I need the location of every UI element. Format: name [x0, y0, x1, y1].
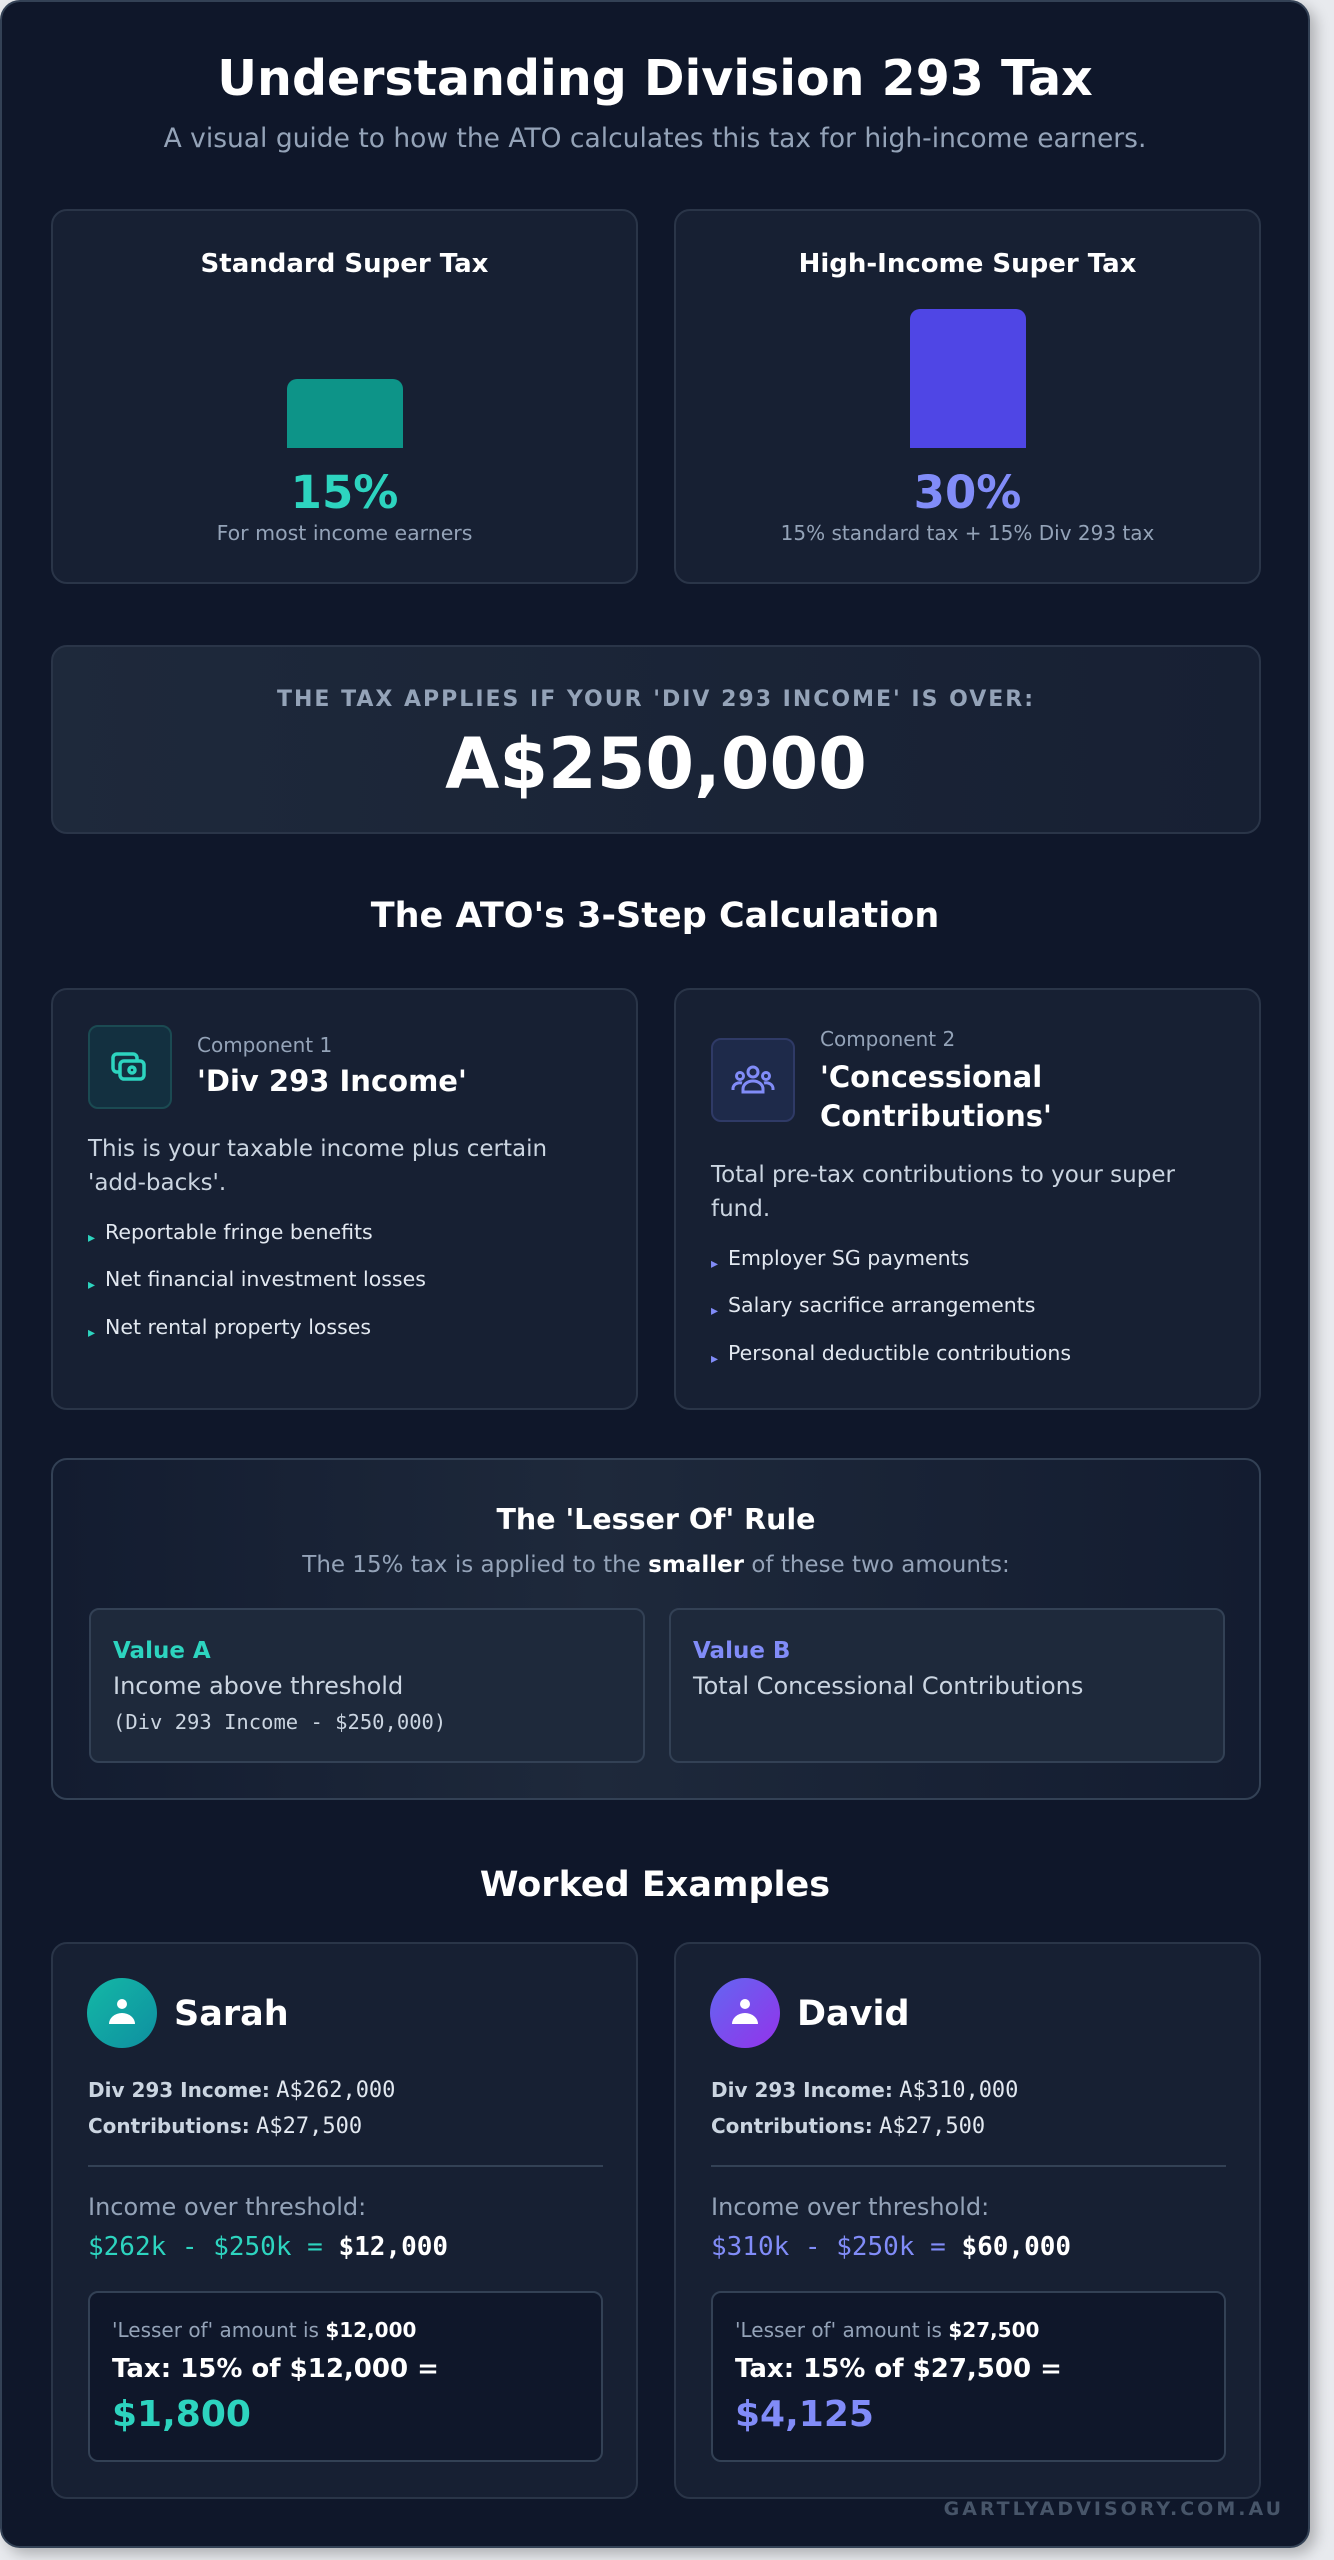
list: add-backs: Net financial investment losses [105, 1267, 426, 1291]
panel: component 1: 'Div 293 Income' [197, 1064, 467, 1098]
box: result David [711, 2291, 1226, 2462]
box: value A: Value A [113, 1638, 211, 1664]
title: Understanding Division 293 Tax [217, 50, 1093, 107]
panel: component 2: Component 2 [820, 1027, 955, 1051]
panel: standard super tax: 15% [291, 466, 398, 519]
panel: threshold: A$250,000 [445, 723, 867, 805]
panel: lesser-of rule: The 'Lesser Of' Rule [496, 1503, 816, 1536]
panel: threshold: THE TAX APPLIES IF YOUR 'DIV 293 INCOME' IS OVER: [277, 687, 1035, 712]
panel: David [674, 1942, 1261, 2499]
box: result Sarah: $1,800 [112, 2394, 251, 2435]
list: contributions: Personal deductible contributions [728, 1341, 1071, 1365]
list: contributions [711, 1246, 1071, 1365]
panel: lesser-of rule: The 15% tax is applied to the smaller of these two amounts: [302, 1552, 1010, 1578]
text: description: This is your taxable income plus certain 'add-backs'. [88, 1136, 547, 1196]
list: contributions: Salary sacrifice arrangements [728, 1293, 1035, 1317]
panel: David: Div 293 Income: A$310,000 [711, 2078, 1018, 2103]
box: result David: Tax: 15% of $27,500 = [735, 2354, 1062, 2384]
panel: lesser-of rule [51, 1458, 1261, 1800]
box: result David: $4,125 [735, 2394, 874, 2435]
panel: component 2: 'Concessional Contributions' [820, 1060, 1052, 1133]
panel: Sarah: Contributions: A$27,500 [88, 2114, 362, 2139]
heading: 3-step calculation: The ATO's 3-Step Calculation [371, 896, 939, 936]
panel: Sarah: $262k - $250k = $12,000 [88, 2232, 448, 2262]
panel: component 1: Component 1 [197, 1033, 332, 1057]
panel: David: $310k - $250k = $60,000 [711, 2232, 1071, 2262]
panel: high-income super tax: High-Income Super Tax [799, 249, 1136, 279]
panel: component 2 [674, 988, 1261, 1410]
box: value A [89, 1608, 645, 1763]
list: contributions: Employer SG payments [728, 1246, 969, 1270]
panel: high-income super tax: 30% [914, 466, 1021, 519]
box: value A: Income above threshold [113, 1672, 403, 1700]
box: value A: (Div 293 Income - $250,000) [113, 1710, 446, 1734]
bar: 30% [910, 309, 1026, 448]
panel: high-income super tax: 15% standard tax + 15% Div 293 tax [781, 521, 1154, 545]
box: result David: 'Lesser of' amount is $27,500 [735, 2318, 1039, 2342]
subtitle: A visual guide to how the ATO calculates this tax for high-income earners. [164, 123, 1146, 154]
panel: Sarah: Income over threshold: [88, 2193, 366, 2221]
panel: Sarah: Div 293 Income: A$262,000 [88, 2078, 395, 2103]
list: add-backs [88, 1220, 426, 1339]
icon: avatar purple [710, 1978, 780, 2048]
panel: David: David [797, 1994, 910, 2034]
list: add-backs: Net rental property losses [105, 1315, 371, 1339]
panel: standard super tax: For most income earners [217, 521, 472, 545]
icon: people [711, 1038, 795, 1122]
panel: high-income super tax [674, 209, 1261, 584]
text: description: Total pre-tax contributions to your super fund. [711, 1162, 1175, 1222]
box: result Sarah: Tax: 15% of $12,000 = [112, 2354, 439, 2384]
panel: standard super tax [51, 209, 638, 584]
list: add-backs: Reportable fringe benefits [105, 1220, 373, 1244]
box: value B: Total Concessional Contributions [693, 1672, 1083, 1700]
box: value B: Value B [693, 1638, 790, 1664]
panel: threshold [51, 645, 1261, 834]
icon: money [88, 1025, 172, 1109]
icon: avatar teal [87, 1978, 157, 2048]
heading: worked examples: Worked Examples [480, 1865, 830, 1905]
panel: Sarah [51, 1942, 638, 2499]
panel: component 1 [51, 988, 638, 1410]
panel: David: Income over threshold: [711, 2193, 989, 2221]
bar: 15% [287, 379, 403, 448]
box: result Sarah: 'Lesser of' amount is $12,000 [112, 2318, 416, 2342]
footer: website: GARTLYADVISORY.COM.AU [944, 2498, 1284, 2520]
box: result Sarah [88, 2291, 603, 2462]
panel: standard super tax: Standard Super Tax [201, 249, 488, 279]
panel: David: Contributions: A$27,500 [711, 2114, 985, 2139]
panel: Sarah: Sarah [174, 1994, 289, 2034]
box: value B [669, 1608, 1225, 1763]
